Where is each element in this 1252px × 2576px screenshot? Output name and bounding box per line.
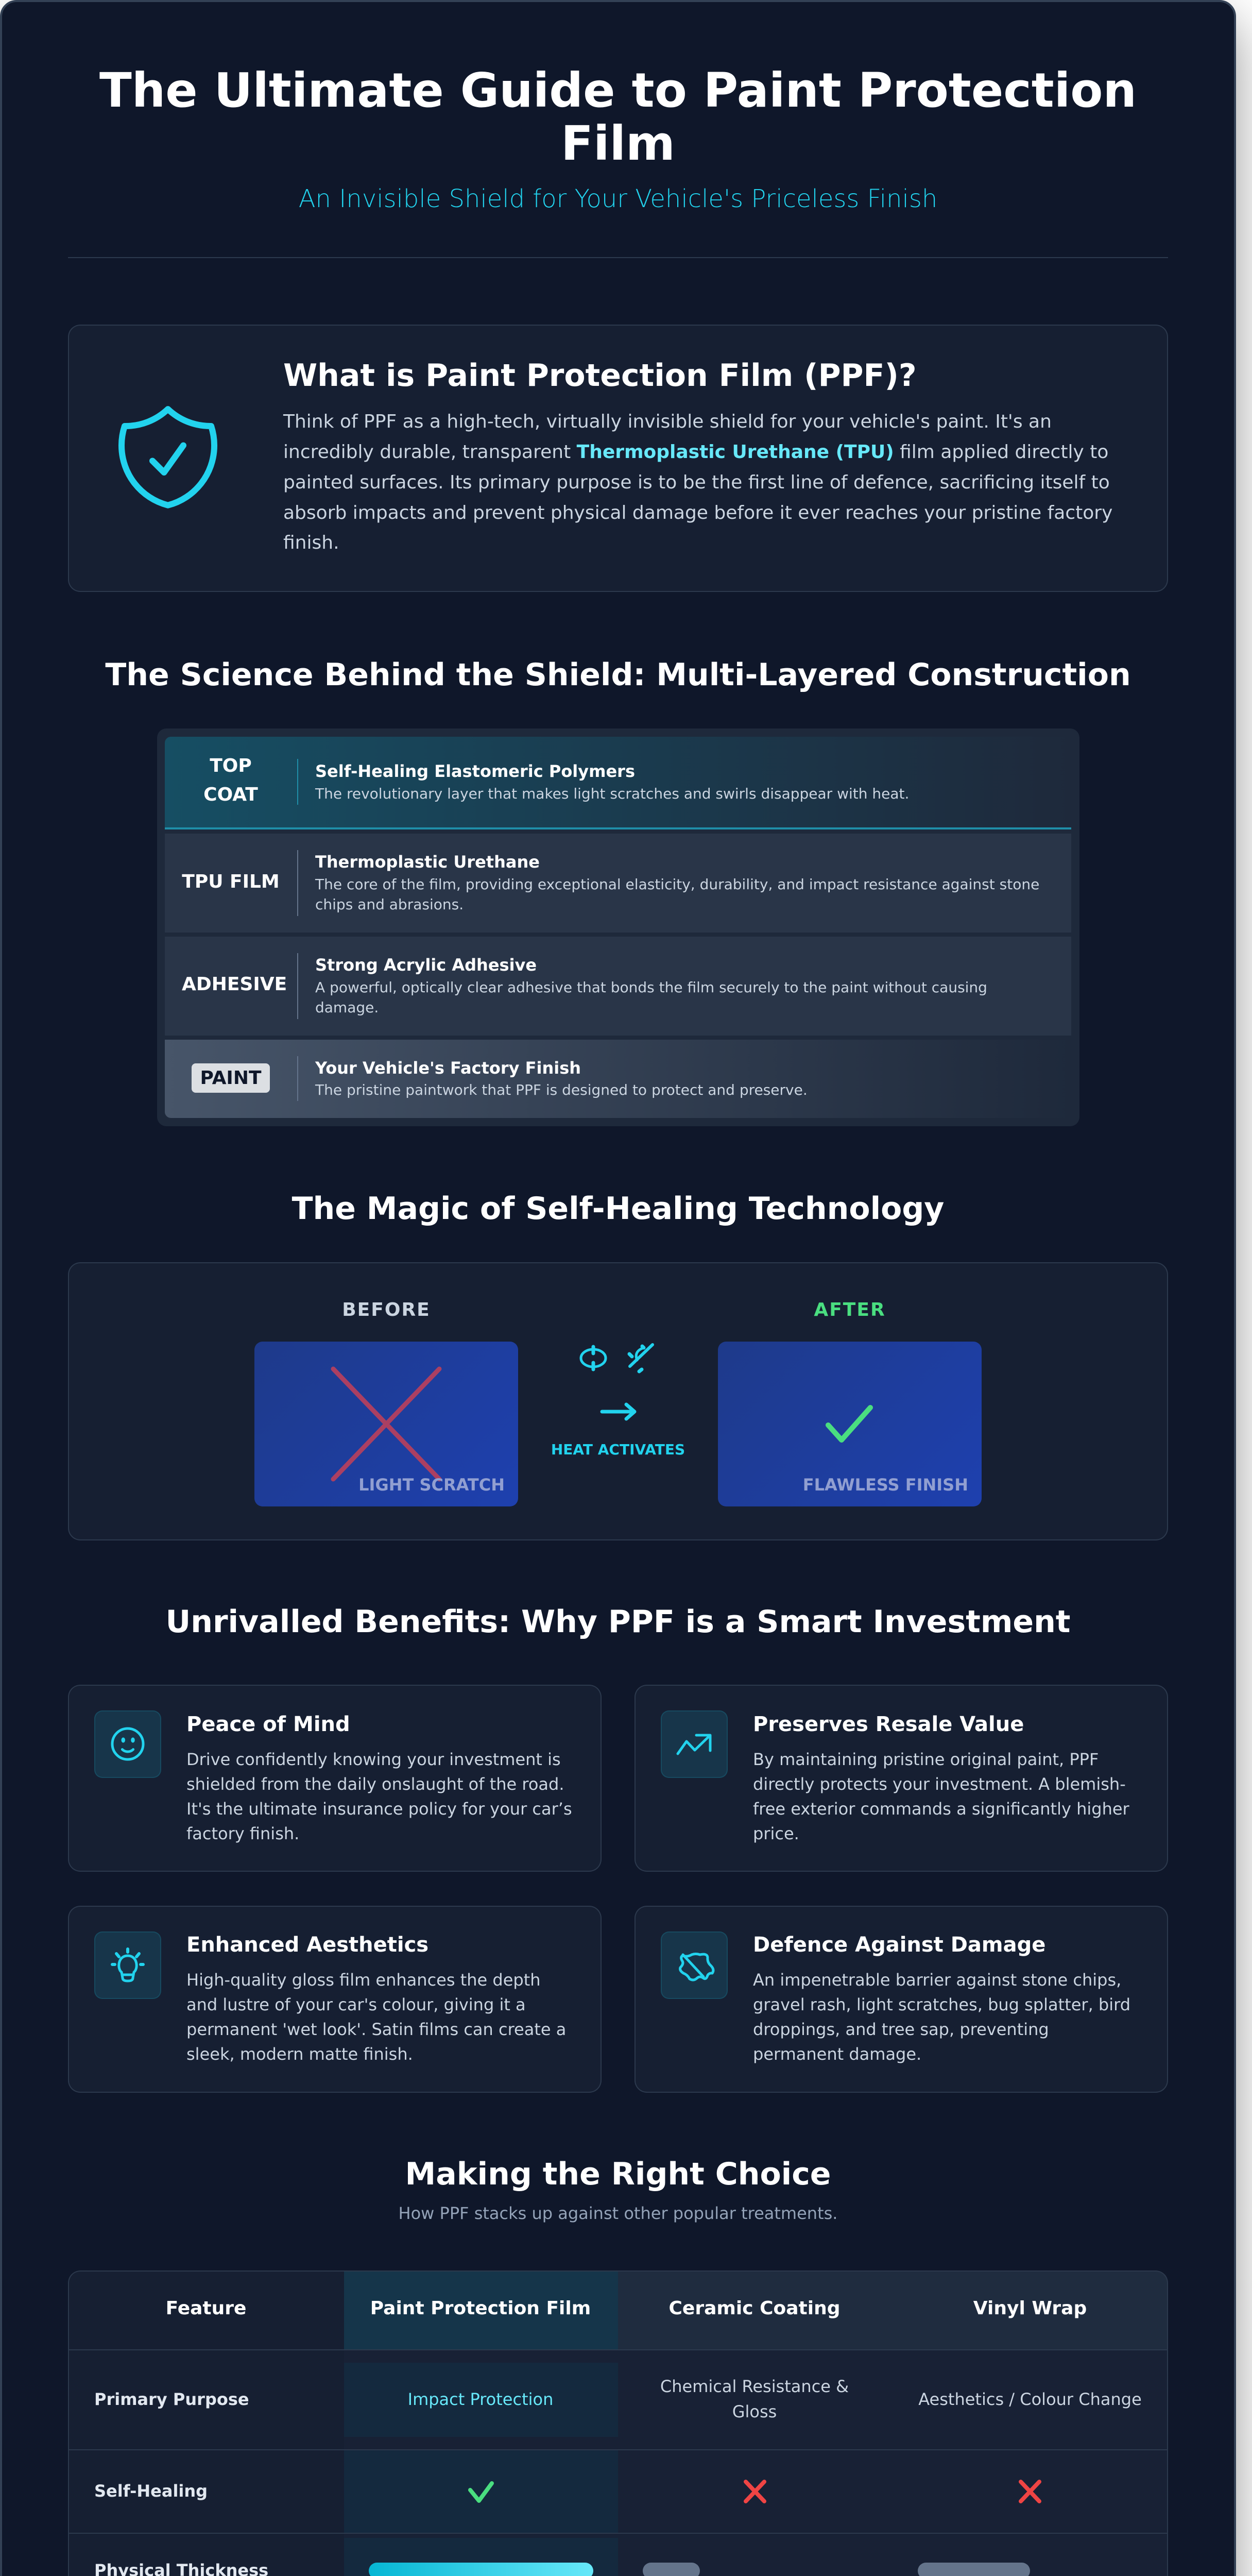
- card text: [753, 1970, 1130, 2064]
- title: The Ultimate Guide to Paint Protection: [99, 63, 1137, 118]
- layer description: The core of the film, providing exceptional elasticity, durability, and impact resistance against stone: [315, 876, 1039, 893]
- card text: and lustre of your car's colour, giving it a: [186, 1995, 526, 2014]
- heading: science: The Science Behind the Shield: Multi-Layered Construction: [105, 657, 1131, 693]
- row: self-healing: Self-Healing: [94, 2481, 208, 2501]
- label: paint badge: [192, 1063, 270, 1093]
- icon: check mark: [826, 1405, 873, 1443]
- layer: top coat: [165, 737, 1071, 829]
- title: [99, 63, 1137, 171]
- row: physical thickness: [68, 2533, 1168, 2576]
- description text: finish.: [283, 532, 339, 553]
- icon: light bulb: [94, 1931, 161, 1999]
- card title: Defence Against Damage: [753, 1933, 1045, 1957]
- card text: gravel rash, light scratches, bug splatter, bird: [753, 1995, 1130, 2014]
- panel: self-healing demo: [68, 1262, 1168, 1540]
- title: Film: [561, 116, 675, 171]
- card text: droppings, and tree sap, preventing: [753, 2020, 1049, 2039]
- subtitle: An Invisible Shield for Your Vehicle's Priceless Finish: [299, 184, 937, 213]
- after panel with check: [718, 1342, 982, 1506]
- heading: self-healing: The Magic of Self-Healing Technology: [292, 1191, 944, 1227]
- description text: [283, 411, 1112, 553]
- layer: TPU film: [165, 834, 1071, 933]
- card text: An impenetrable barrier against stone chips,: [753, 1970, 1121, 1990]
- label: adhesive: ADHESIVE: [182, 974, 287, 995]
- card text: [186, 1750, 572, 1843]
- layer description: damage.: [315, 999, 379, 1016]
- layer description: The revolutionary layer that makes light scratches and swirls disappear with heat.: [315, 785, 909, 802]
- label: paint badge: PAINT: [200, 1067, 262, 1089]
- card text: directly protects your investment. A blemish-: [753, 1774, 1126, 1794]
- card text: shielded from the daily onslaught of the road.: [186, 1774, 564, 1794]
- icon: yes check: [465, 2476, 498, 2506]
- label: top coat: TOP: [210, 755, 252, 776]
- layer description: [315, 876, 1039, 913]
- layer title: Thermoplastic Urethane: [315, 852, 540, 872]
- icon: no cross: [739, 2476, 771, 2506]
- table header: Feature: [166, 2298, 246, 2319]
- before panel with scratch: [254, 1342, 518, 1506]
- layer description: [315, 979, 987, 1016]
- card text: free exterior commands a significantly higher: [753, 1799, 1129, 1819]
- layer description: The pristine paintwork that PPF is designed to protect and preserve.: [315, 1081, 808, 1098]
- row: primary purpose: Aesthetics / Colour Change: [918, 2389, 1142, 2409]
- card text: Drive confidently knowing your investment is: [186, 1750, 561, 1769]
- card: resale value: [634, 1685, 1168, 1872]
- icon: damage blocked: [661, 1931, 728, 1999]
- description text: Think of PPF as a high-tech, virtually invisible shield for your vehicle's paint. It's an: [283, 411, 1052, 432]
- card text: permanent 'wet look'. Satin films can create a: [186, 2020, 566, 2039]
- layer description: A powerful, optically clear adhesive that bonds the film securely to the paint without causing: [315, 979, 987, 996]
- heading: comparison: Making the Right Choice: [405, 2156, 831, 2192]
- card: peace of mind: [68, 1685, 602, 1872]
- layer: paint: [165, 1040, 1071, 1118]
- card title: Enhanced Aesthetics: [186, 1933, 428, 1957]
- row: primary purpose: Gloss: [732, 2402, 777, 2421]
- card text: [186, 1970, 566, 2064]
- heading: What is Paint Protection Film (PPF)?: [283, 358, 917, 394]
- card: defence: [634, 1906, 1168, 2093]
- table header: [166, 2298, 1087, 2319]
- icon: smile: [94, 1710, 161, 1778]
- panel: layer stack: [157, 728, 1079, 1126]
- description text: incredibly durable, transparent Thermoplastic Urethane (TPU) film applied directly to: [283, 442, 1108, 463]
- caption: light scratch: LIGHT SCRATCH: [358, 1475, 505, 1495]
- layer title: Self-Healing Elastomeric Polymers: [315, 761, 635, 781]
- card text: sleek, modern matte finish.: [186, 2044, 413, 2064]
- card title: Preserves Resale Value: [753, 1713, 1024, 1736]
- card text: It's the ultimate insurance policy for your car’s: [186, 1799, 572, 1819]
- label: heat activates: HEAT ACTIVATES: [551, 1441, 685, 1458]
- icon: no cross: [1014, 2476, 1047, 2506]
- icon: trending up: [661, 1710, 728, 1778]
- row: primary purpose: Chemical Resistance &: [660, 2377, 849, 2396]
- bar: ceramic thickness: [643, 2563, 700, 2576]
- row: primary purpose: [94, 2377, 1142, 2421]
- comparison table: [68, 2270, 1168, 2576]
- table header: Ceramic Coating: [668, 2298, 841, 2319]
- card text: price.: [753, 1824, 799, 1843]
- icons: heat and arrow: [580, 1343, 654, 1421]
- label: before: BEFORE: [342, 1299, 431, 1320]
- card text: factory finish.: [186, 1824, 299, 1843]
- bar: PPF thickness: [369, 2563, 593, 2576]
- layer: adhesive: [165, 937, 1071, 1036]
- layer title: Strong Acrylic Adhesive: [315, 955, 537, 975]
- layer title: Your Vehicle's Factory Finish: [315, 1058, 581, 1078]
- table header: Paint Protection Film: [370, 2298, 591, 2319]
- heading: benefits: Unrivalled Benefits: Why PPF is a Smart Investment: [166, 1604, 1070, 1640]
- row: self-healing: [94, 2480, 1041, 2503]
- label: after: AFTER: [814, 1299, 886, 1320]
- description text: painted surfaces. Its primary purpose is to be the first line of defence, sacrificing itself to: [283, 472, 1110, 493]
- description text: absorb impacts and prevent physical damage before it ever reaches your pristine factory: [283, 502, 1112, 523]
- card title: Peace of Mind: [186, 1713, 350, 1736]
- table header: Vinyl Wrap: [973, 2298, 1087, 2319]
- panel: what is PPF: [68, 325, 1168, 592]
- card text: permanent damage.: [753, 2044, 921, 2064]
- row: primary purpose: Primary Purpose: [94, 2389, 249, 2409]
- label: top coat: COAT: [203, 784, 258, 805]
- card text: By maintaining pristine original paint, PPF: [753, 1750, 1099, 1769]
- label: TPU film: TPU FILM: [182, 871, 280, 892]
- comparison subtitle: How PPF stacks up against other popular treatments.: [399, 2204, 837, 2223]
- layer description: chips and abrasions.: [315, 896, 464, 913]
- label: top coat: [203, 755, 258, 805]
- caption: flawless finish: FLAWLESS FINISH: [803, 1475, 968, 1495]
- card text: [753, 1750, 1129, 1843]
- card text: High-quality gloss film enhances the depth: [186, 1970, 541, 1990]
- icon: scratch cross: [331, 1366, 442, 1482]
- card: aesthetics: [68, 1906, 602, 2093]
- icon: shield with check: [118, 406, 217, 509]
- row: primary purpose: Impact Protection: [408, 2389, 553, 2409]
- bar: vinyl thickness: [918, 2563, 1030, 2576]
